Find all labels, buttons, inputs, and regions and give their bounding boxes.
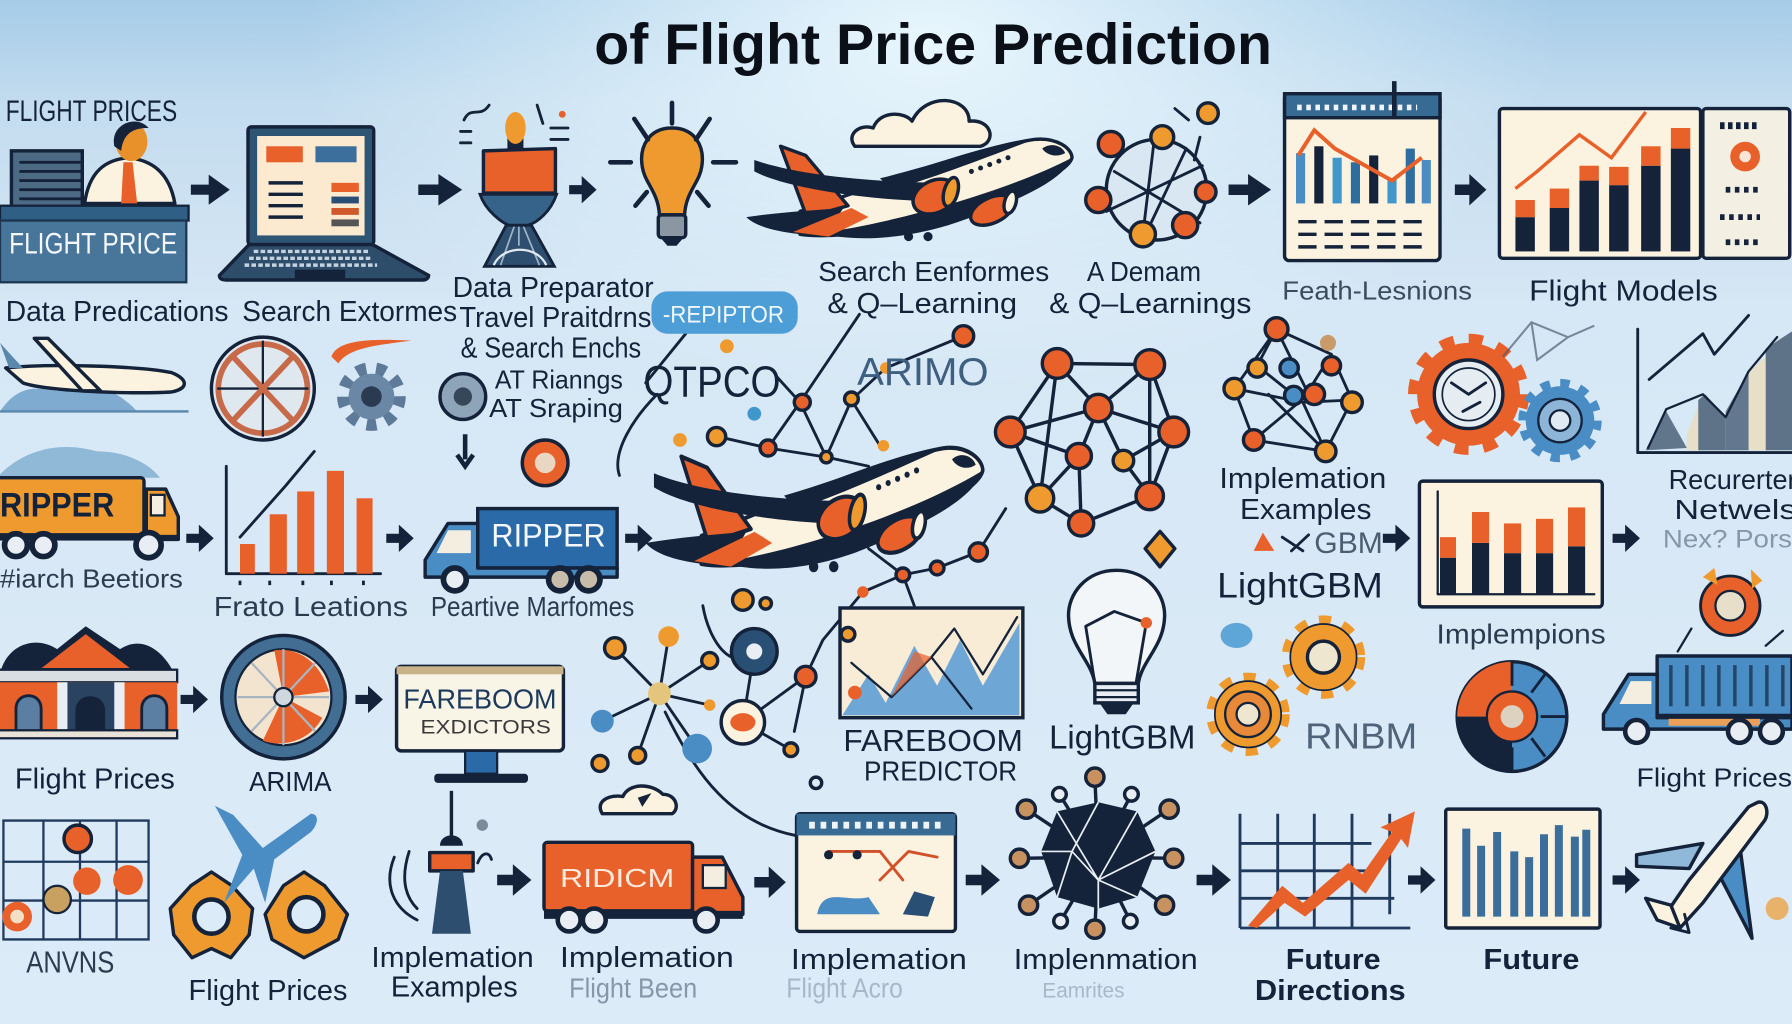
pill: repiptor: -REPIPTOR xyxy=(663,301,784,328)
label: ARIMO: ARIMO xyxy=(857,351,989,394)
arrow xyxy=(186,525,214,552)
label: ARIMA xyxy=(249,766,332,797)
label block xyxy=(1014,944,1198,1003)
label: Feath-Lesnions xyxy=(1282,275,1472,305)
label: data preparation block: Travel Praitdrns xyxy=(459,302,651,334)
icon: monitor: FAREBOOM xyxy=(403,684,557,715)
icon: amber gear bottom xyxy=(1213,679,1283,750)
panel: big network xyxy=(995,349,1189,536)
icon: yellow truck: RIPPER xyxy=(0,487,115,525)
arrow xyxy=(569,176,597,203)
icon: small badge xyxy=(1145,531,1175,567)
icon: orange truck: RIDICM xyxy=(560,863,674,893)
label xyxy=(1049,256,1251,320)
arrow xyxy=(1408,866,1435,894)
label: Flight Models xyxy=(1529,276,1718,308)
icon: orange truck xyxy=(544,842,743,931)
icon: monitor xyxy=(397,666,563,783)
arrow xyxy=(1455,174,1486,205)
label: RNBM xyxy=(1305,716,1417,757)
label: Flight Prices xyxy=(15,764,175,796)
chart: fareboom area chart xyxy=(840,608,1023,718)
panel: row 4 xyxy=(0,568,1792,797)
row 1 labels xyxy=(6,256,1718,423)
arrow xyxy=(1613,866,1640,894)
chart: area peaks xyxy=(1638,315,1792,453)
arrow xyxy=(418,174,462,205)
arrow xyxy=(355,686,383,713)
icon: lens xyxy=(440,374,486,419)
panel: dashboard illustration xyxy=(797,814,955,931)
label block: Netwels xyxy=(1674,494,1792,525)
title: of Flight Price Prediction xyxy=(594,13,1272,77)
label block: implementation examples: Examples xyxy=(1240,494,1371,526)
label xyxy=(818,256,1049,320)
label block xyxy=(1255,944,1406,1007)
label: data preparation block: Data Preparator xyxy=(453,272,654,304)
icon: monitor: EXDICTORS xyxy=(421,717,551,739)
arrow xyxy=(1613,525,1640,552)
label: data preparation block: AT Sraping xyxy=(489,393,623,423)
arrow xyxy=(1197,864,1231,896)
label block: Future xyxy=(1286,944,1381,976)
label: & Q–Learnings xyxy=(1049,288,1251,320)
label block: implementation examples xyxy=(1219,463,1386,560)
label block: implementation examples: GBM xyxy=(1314,527,1383,560)
icon: control tower xyxy=(461,105,568,266)
panel: row 3 xyxy=(0,447,1792,835)
panel: bar chart with sidebar xyxy=(1499,109,1790,258)
label block: Implemation xyxy=(371,942,534,974)
chart: orange bars xyxy=(226,451,381,585)
panel: bar skyline xyxy=(1446,809,1600,928)
panel: dark polygon network xyxy=(1010,768,1183,938)
label: Search Extormes xyxy=(242,296,457,328)
icon: central airliner xyxy=(646,448,983,572)
icon: control tower slim xyxy=(390,791,491,934)
label: Search Eenformes xyxy=(818,256,1049,287)
label: LightGBM xyxy=(1049,720,1195,757)
label block: Eamrites xyxy=(1042,978,1125,1003)
icon: light bulb xyxy=(610,103,736,246)
label block xyxy=(843,723,1023,787)
pill: repiptor xyxy=(651,291,798,334)
chart: donut pie xyxy=(1457,662,1567,771)
panel: row 2 xyxy=(0,315,1792,536)
label block xyxy=(560,942,734,1004)
label block xyxy=(371,942,534,1004)
label block: Implenmation xyxy=(1014,944,1198,976)
icon: white plane xyxy=(1637,802,1789,938)
label block: Directions xyxy=(1255,975,1406,1007)
icon: blue lens xyxy=(1221,623,1253,648)
icon: cloud small xyxy=(600,786,676,814)
label block xyxy=(1663,464,1792,553)
label block: implementation examples: Implemation xyxy=(1219,463,1386,495)
icon: network wheel xyxy=(1086,103,1218,247)
heading: flight prices desk: FLIGHT PRICES xyxy=(6,95,177,128)
chart: grid with markers xyxy=(2,821,149,939)
icon: swoosh xyxy=(331,340,411,363)
marks: above gears xyxy=(1503,322,1594,360)
icon: gears with plane xyxy=(170,806,347,958)
label: Implempions xyxy=(1437,618,1606,649)
arrow xyxy=(625,525,653,552)
icon: yellow truck xyxy=(0,447,178,558)
panel: row 5 xyxy=(2,768,1789,1007)
label block: FAREBOOM xyxy=(843,723,1023,758)
icon: airliner xyxy=(746,139,1072,241)
label: Future xyxy=(1483,944,1579,976)
label: & Q–Learning xyxy=(827,288,1017,320)
icon: blue truck xyxy=(425,509,617,591)
chart: growth grid with red arrow xyxy=(1240,811,1415,928)
icon: dial xyxy=(222,635,345,759)
panel: small network xyxy=(1224,318,1362,462)
label: LightGBM xyxy=(1217,566,1383,606)
arrow xyxy=(1229,174,1271,205)
label block xyxy=(786,944,967,1004)
icon: agent at desk xyxy=(0,122,189,282)
icon: laptop xyxy=(219,127,429,280)
label block: Nex? Pors xyxy=(1663,525,1792,553)
label block: Implemation xyxy=(560,942,734,974)
chart: stacked bars xyxy=(1419,481,1602,607)
label: Frato Leations xyxy=(214,591,408,622)
label: ANVNS xyxy=(26,945,114,980)
label block: PREDICTOR xyxy=(864,756,1017,787)
icon: container truck xyxy=(1603,656,1792,743)
icon: gear xyxy=(345,370,398,423)
panel: row 1 xyxy=(0,81,1790,282)
label: Peartive Marfomes xyxy=(431,591,634,622)
arrow xyxy=(181,686,208,713)
label: data preparation block: & Search Enchs xyxy=(461,333,641,365)
arrow xyxy=(754,867,786,898)
label: Flight Prices xyxy=(1637,762,1792,792)
icon: wheel xyxy=(211,337,314,440)
arrow xyxy=(497,864,531,896)
icon: clear bulb xyxy=(1069,570,1165,714)
icon: blue truck: RIPPER xyxy=(491,517,606,553)
icon: orange badge xyxy=(1678,568,1783,651)
icon: blue gear xyxy=(1523,384,1597,457)
label: A Demam xyxy=(1087,256,1201,287)
panel: dashboard line chart xyxy=(1285,81,1440,261)
arrow xyxy=(191,175,230,205)
label block: Flight Acro xyxy=(786,973,903,1004)
panel: central network lines xyxy=(457,314,974,486)
arrow xyxy=(966,864,1000,896)
label: data preparation block: AT Rianngs xyxy=(495,365,623,395)
label: #iarch Beetiors xyxy=(0,563,183,593)
label: Flight Prices xyxy=(189,975,347,1007)
label: Data Predications xyxy=(6,296,229,328)
icon: amber gear top xyxy=(1288,622,1359,693)
icon: cloud xyxy=(852,101,990,146)
label: QTPCO: QTPCO xyxy=(643,359,781,407)
label block: Implemation xyxy=(791,944,967,976)
label: data preparation block xyxy=(453,272,654,423)
arrow xyxy=(1383,525,1410,552)
icon: orange gear xyxy=(1415,341,1522,448)
icon: terminal building xyxy=(0,626,177,738)
icon: agent at desk: FLIGHT PRICE xyxy=(9,228,177,261)
icon: small plane xyxy=(0,338,189,411)
label block: Examples xyxy=(391,972,518,1004)
label block: Flight Been xyxy=(569,973,697,1004)
panel: lower network lines xyxy=(591,509,1006,835)
arrow xyxy=(386,525,414,552)
